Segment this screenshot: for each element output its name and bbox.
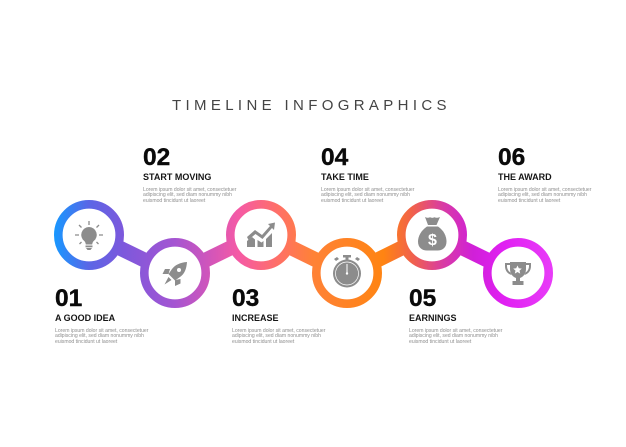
step 06 description: euismod tincidunt ut laoreet	[498, 198, 560, 204]
step 01 description: euismod tincidunt ut laoreet	[55, 339, 117, 345]
icon: rocket	[162, 262, 187, 286]
step 02 description: Lorem ipsum dolor sit amet, consectetuer	[143, 187, 236, 193]
step 03 heading: INCREASE	[232, 312, 279, 322]
step 01 description: adipiscing elit, sed diam nonummy nibh	[55, 333, 144, 339]
step 01 description	[55, 328, 148, 345]
step 05 text	[409, 284, 502, 345]
connector links	[89, 233, 518, 275]
step 06 heading: THE AWARD	[498, 172, 552, 182]
step 02 number: 02	[143, 144, 170, 170]
step 06 number: 06	[498, 144, 525, 170]
icon: light bulb	[75, 221, 103, 250]
step 06 description: adipiscing elit, sed diam nonummy nibh	[498, 192, 587, 198]
ring 2	[144, 242, 206, 304]
icon: stopwatch	[333, 255, 361, 288]
step 02 description: euismod tincidunt ut laoreet	[143, 198, 205, 204]
step 06 text	[498, 144, 592, 204]
step 02 text	[143, 144, 236, 204]
step 06 description	[498, 187, 592, 204]
step 03 description: Lorem ipsum dolor sit amet, consectetuer	[232, 328, 325, 334]
step 03 description: euismod tincidunt ut laoreet	[232, 339, 294, 345]
ring 1	[58, 204, 120, 266]
ring 6	[487, 242, 549, 304]
ring 4	[316, 242, 378, 304]
step 04 description: euismod tincidunt ut laoreet	[321, 198, 383, 204]
step 04 description	[321, 187, 414, 204]
ring 3	[230, 204, 292, 266]
step 06 description: Lorem ipsum dolor sit amet, consectetuer	[498, 187, 591, 193]
step 01 description: Lorem ipsum dolor sit amet, consectetuer	[55, 328, 148, 334]
step 05 description: euismod tincidunt ut laoreet	[409, 339, 471, 345]
step 05 description: Lorem ipsum dolor sit amet, consectetuer	[409, 328, 502, 334]
step 05 number: 05	[409, 284, 436, 312]
step 03 description: adipiscing elit, sed diam nonummy nibh	[232, 333, 321, 339]
step 04 text	[321, 144, 414, 204]
step 02 heading: START MOVING	[143, 172, 211, 182]
step 04 number: 04	[321, 144, 348, 170]
step 04 description: adipiscing elit, sed diam nonummy nibh	[321, 192, 410, 198]
title: TIMELINE INFOGRAPHICS	[172, 96, 451, 114]
step 04 heading: TAKE TIME	[321, 172, 369, 182]
step 02 description	[143, 187, 236, 204]
icon: money bag	[418, 217, 446, 250]
step 01 heading: A GOOD IDEA	[55, 312, 115, 322]
step 04 description: Lorem ipsum dolor sit amet, consectetuer	[321, 187, 414, 193]
step 03 description	[232, 328, 326, 345]
ring 5	[401, 204, 463, 266]
icon: dollar sign: $	[428, 232, 437, 249]
step 01 number: 01	[55, 284, 82, 312]
step 02 description: adipiscing elit, sed diam nonummy nibh	[143, 192, 232, 198]
icon: growth chart	[247, 222, 275, 247]
icon: trophy	[505, 262, 531, 285]
step 03 number: 03	[232, 284, 259, 312]
step 01 text	[55, 284, 148, 345]
step 05 description: adipiscing elit, sed diam nonummy nibh	[409, 333, 498, 339]
step 05 heading: EARNINGS	[409, 312, 457, 322]
step 05 description	[409, 328, 502, 345]
step 03 text	[232, 284, 326, 345]
